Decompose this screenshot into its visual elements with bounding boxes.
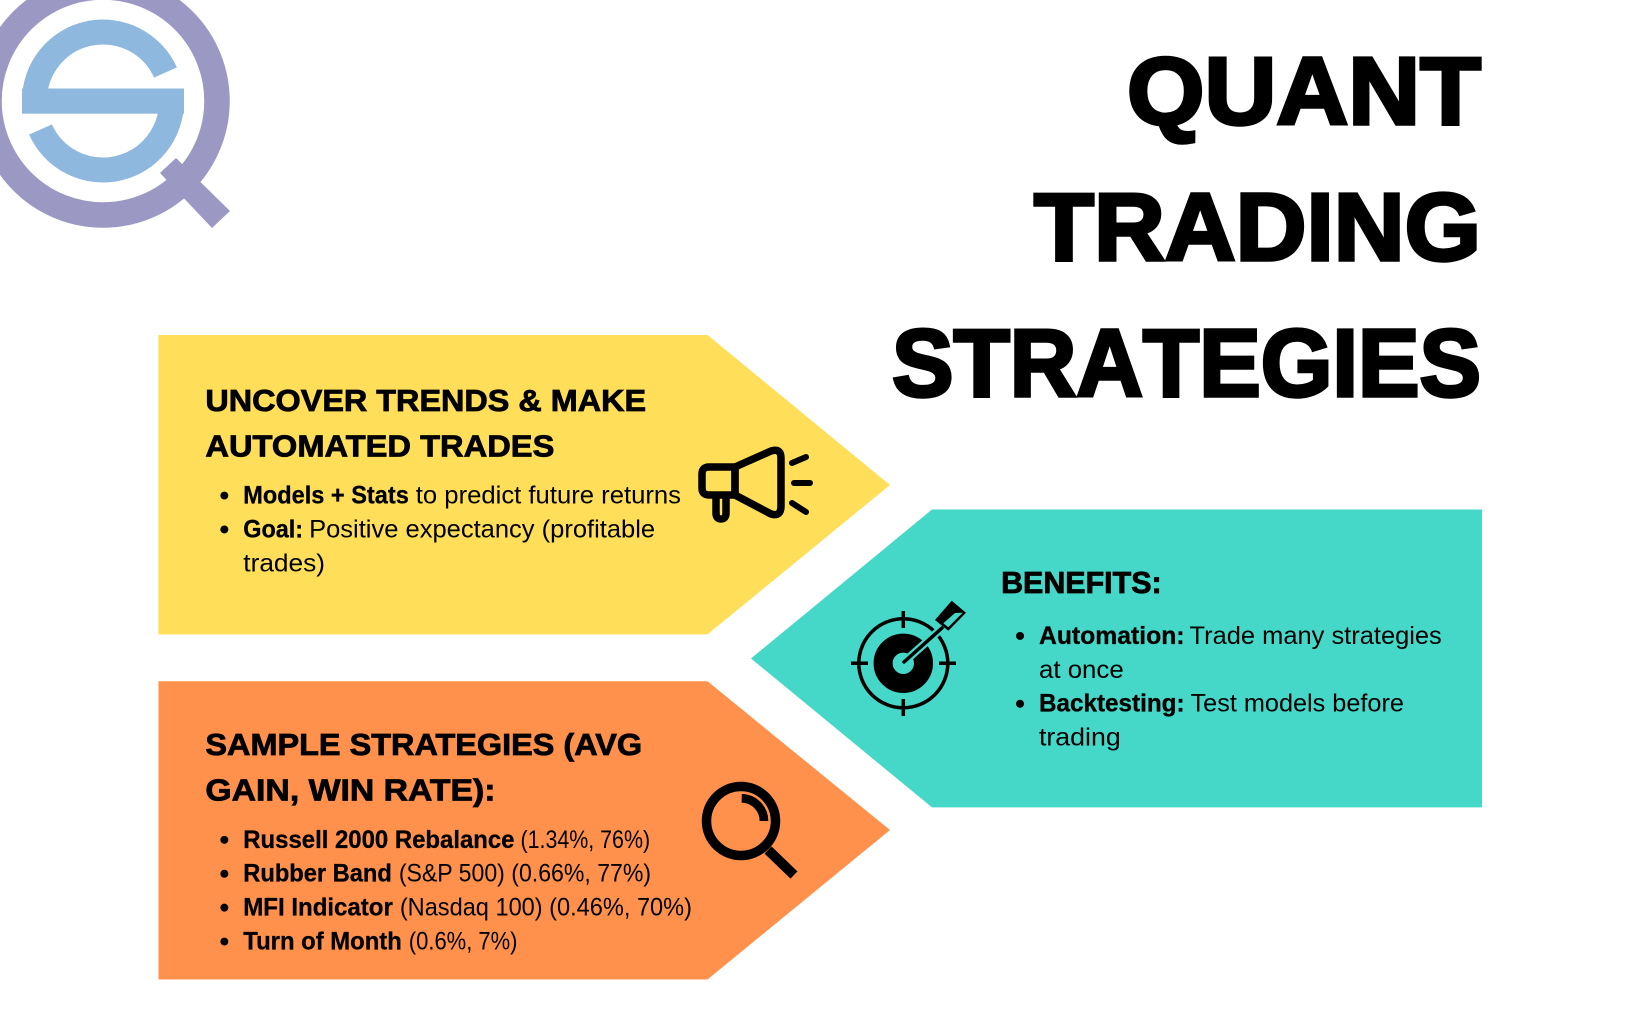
bullet list: strategies: (1.34%, 76%) [520,826,650,854]
teal arrow shape [751,510,1482,807]
bullet list: strategies: (0.6%, 7%) [409,928,517,956]
title: STRATEGIES [892,310,1481,417]
bullet list: automation and backtesting: at once [1039,656,1124,684]
orange arrow shape [158,681,890,980]
icon: magnifying glass [706,786,794,875]
bullet list: automation and backtesting: trading [1039,724,1121,752]
bullet list: models and goal: trades) [243,549,325,577]
yellow arrow shape [158,335,890,634]
bullet list: automation and backtesting: Test models before [1191,690,1404,718]
icon: target with arrow [851,601,966,716]
panel: uncover trends [158,335,890,634]
icon: megaphone [702,450,810,519]
bullet list: strategies [220,826,692,956]
heading: sample strategies [205,727,642,808]
bullet list: models and goal: Positive expectancy (profitable [309,515,655,543]
title: TRADING [1034,174,1481,281]
bullet list: strategies: (Nasdaq 100) (0.46%, 70%) [400,894,692,922]
panel: sample strategies [158,681,890,980]
bullet list: models and goal: Models + Stats [243,482,409,510]
bullet list: automation and backtesting: Backtesting: [1039,690,1185,718]
heading: benefits: BENEFITS: [1001,565,1162,600]
heading: uncover trends: UNCOVER TRENDS & MAKE [205,383,646,418]
bullet list: strategies: Turn of Month [243,928,402,956]
title: QUANT [1127,38,1481,145]
panel: benefits [751,510,1482,807]
bullet list: automation and backtesting [1016,622,1442,752]
bullet list: strategies: MFI Indicator [243,894,393,922]
bullet list: models and goal: to predict future returns [416,482,681,510]
bullet list: strategies: Rubber Band [243,860,392,888]
title [892,38,1481,417]
logo: SQ magnifier mark [0,0,230,228]
bullet list: models and goal: Goal: [243,515,303,543]
bullet list: automation and backtesting: Trade many strategies [1190,622,1442,650]
heading: sample strategies: GAIN, WIN RATE): [205,773,496,808]
heading: sample strategies: SAMPLE STRATEGIES (AVG [205,727,642,762]
heading: uncover trends: AUTOMATED TRADES [205,429,554,464]
bullet list: strategies: (S&P 500) (0.66%, 77%) [399,860,651,888]
bullet list: automation and backtesting: Automation: [1039,622,1185,650]
bullet list: strategies: Russell 2000 Rebalance [243,826,515,854]
bullet list: models and goal [220,482,681,577]
heading: uncover trends [205,383,646,464]
